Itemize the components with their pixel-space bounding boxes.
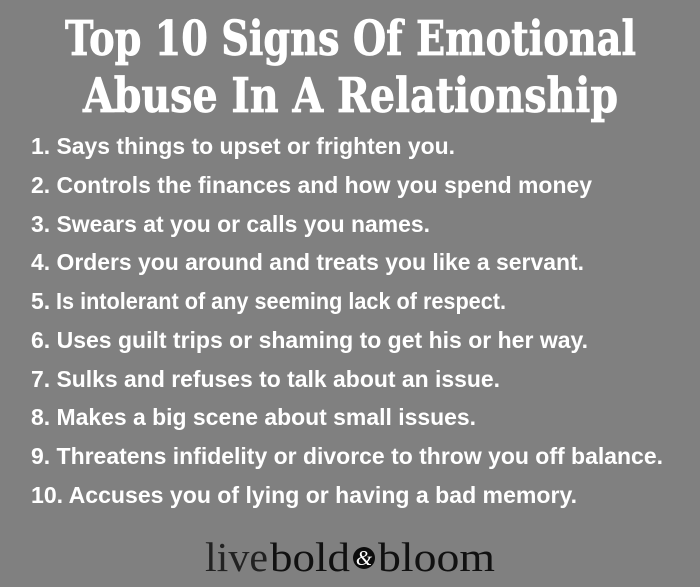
list of signs: 2. Controls the finances and how you spend money (31, 172, 592, 198)
logo: live bold & bloom: live (205, 534, 268, 580)
logo: live bold & bloom (205, 534, 495, 580)
list of signs: 8. Makes a big scene about small issues. (31, 404, 476, 430)
list of signs: 7. Sulks and refuses to talk about an issue. (31, 366, 500, 392)
list of signs: 9. Threatens infidelity or divorce to throw you off balance. (31, 443, 663, 469)
list of signs: 10. Accuses you of lying or having a bad memory. (31, 482, 577, 508)
title (65, 11, 636, 124)
logo: live bold & bloom: bloom (378, 534, 495, 580)
list of signs: 3. Swears at you or calls you names. (31, 211, 430, 237)
list of signs: 6. Uses guilt trips or shaming to get his or her way. (31, 327, 588, 353)
list of signs (31, 133, 663, 508)
logo: live bold & bloom: bold (270, 534, 350, 580)
list of signs: 1. Says things to upset or frighten you. (31, 133, 455, 159)
logo: live bold & bloom: & (356, 546, 373, 570)
list of signs: 5. (31, 288, 50, 314)
list of signs: Is intolerant of any seeming lack of respect. (56, 288, 506, 314)
list of signs: 4. Orders you around and treats you like a servant. (31, 249, 584, 275)
